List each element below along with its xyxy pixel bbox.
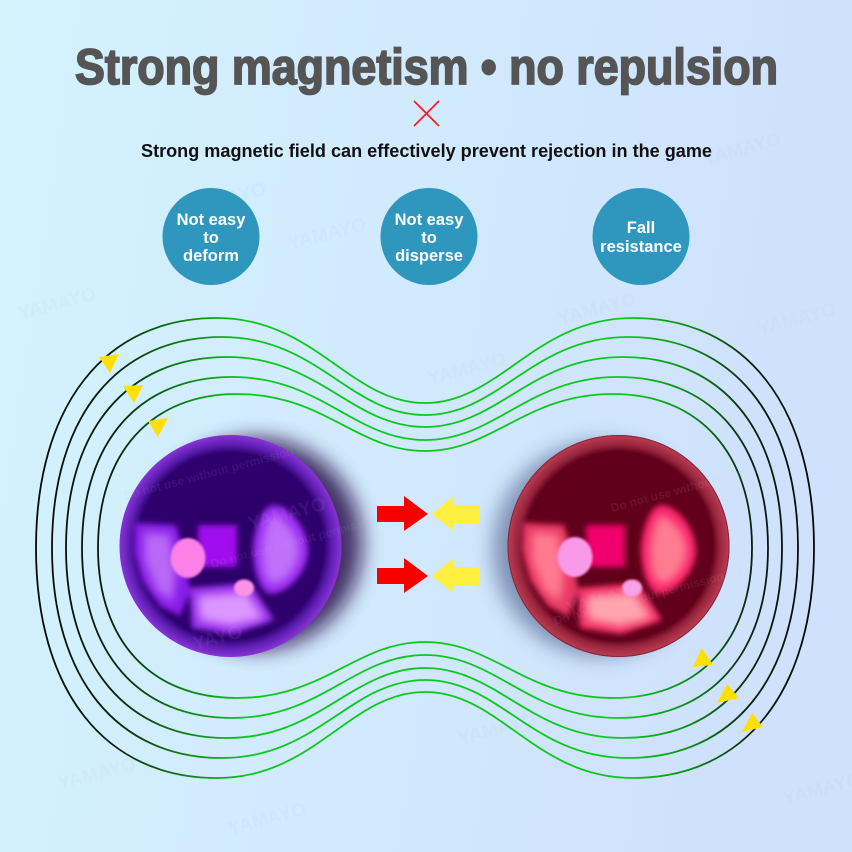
badge: not easy to disperse: disperse — [395, 247, 463, 265]
badge: fall resistance: resistance — [600, 238, 682, 256]
title: Strong magnetism • no repulsion — [75, 39, 778, 95]
purple magnetic ball — [120, 435, 382, 657]
yellow arrow bottom — [432, 558, 480, 593]
badge: fall resistance: Fall — [627, 219, 655, 237]
watermarks: YAMAYO — [456, 709, 538, 750]
red magnetic ball: Do not use without permission — [552, 569, 725, 628]
purple magnetic ball: YAMAYO — [246, 494, 328, 535]
red magnetic ball: Do not use without permission — [609, 456, 782, 515]
badge: not easy to disperse: Not easy — [395, 211, 464, 229]
watermarks: YAMAYO — [186, 179, 268, 220]
field direction arrowheads: top left — [99, 354, 168, 437]
red magnetic ball: YAMAYO — [564, 579, 646, 620]
red arrow top — [377, 496, 428, 531]
badge: not easy to deform: to — [203, 229, 219, 247]
badge: not easy to deform — [162, 188, 260, 285]
badge: not easy to disperse: to — [421, 229, 437, 247]
field direction arrowheads: bottom right — [693, 648, 763, 732]
badge: not easy to disperse — [380, 188, 478, 285]
watermarks: YAMAYO — [286, 214, 368, 255]
watermarks: YAMAYO — [226, 799, 308, 840]
purple magnetic ball: YAYO — [191, 622, 245, 655]
subtitle: Strong magnetic field can effectively prevent rejection in the game — [141, 140, 712, 161]
badge: not easy to deform: deform — [183, 247, 239, 265]
icon: red cross — [414, 101, 439, 126]
red arrow bottom — [377, 558, 428, 593]
red magnetic ball — [493, 435, 782, 657]
purple magnetic ball: Do not use without permission — [209, 512, 382, 571]
badge: not easy to deform: Not easy — [177, 211, 246, 229]
badge: fall resistance — [592, 188, 690, 285]
watermarks: YAMAYO — [556, 289, 638, 330]
magnetic field lines — [36, 318, 814, 778]
purple magnetic ball: Do not use without permission — [122, 444, 295, 503]
watermarks: YAMAYO — [56, 754, 138, 795]
watermarks: YAMAYO — [16, 284, 98, 325]
watermarks: YAMAYO — [701, 129, 783, 170]
yellow arrow top — [432, 496, 480, 531]
watermarks: YAMAYO — [756, 299, 838, 340]
watermarks: YAMAYO — [426, 349, 508, 390]
